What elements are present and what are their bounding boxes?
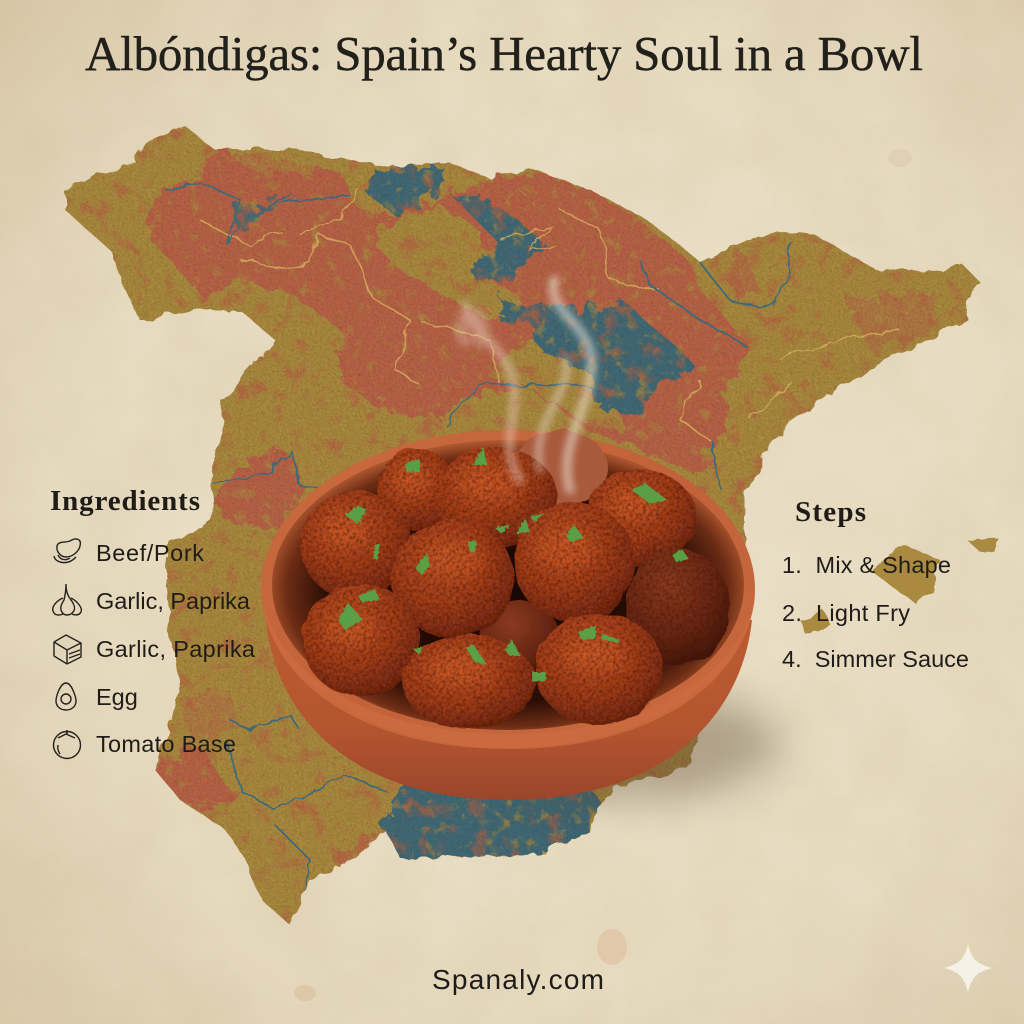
yellow rivers and boundaries: [200, 190, 900, 440]
map of Spain: [50, 110, 1000, 940]
sparkle mark: [944, 944, 992, 992]
region: red north and centre: [150, 150, 940, 865]
bowl body: [266, 620, 752, 800]
item: garlic: Garlic, Paprika: [96, 588, 251, 614]
ingredients heading: Ingredients: [50, 485, 200, 517]
region: blue patches: [235, 165, 695, 860]
steam: [462, 280, 591, 490]
bowl interior: [272, 440, 744, 730]
bowl rim: [261, 430, 755, 748]
item: garlic: [53, 584, 251, 615]
item: tomato: Tomato Base: [96, 731, 236, 757]
item: beef or pork: Beef/Pork: [96, 540, 204, 566]
region: ochre centre patches: [135, 140, 625, 430]
step 1: 1. Mix & Shape: [782, 552, 951, 578]
meatball texture: [300, 447, 730, 729]
item: tomato: [54, 730, 236, 758]
mottling: [68, 152, 968, 921]
Balearic islands: [800, 538, 998, 637]
title: Albóndigas: Spain’s Hearty Soul in a Bowl: [85, 26, 923, 81]
step 4: 4. Simmer Sauce: [782, 646, 969, 672]
blue river lines: [165, 185, 790, 890]
shadow under bowl: [470, 690, 780, 800]
item: egg: Egg: [96, 684, 138, 710]
footer site name: Spanaly.com: [432, 964, 604, 995]
item: beef or pork: [54, 539, 204, 566]
step 2: 2. Light Fry: [782, 600, 910, 626]
ingredients panel: [50, 485, 256, 758]
sauce highlights: [321, 466, 661, 686]
meatball speckle: [304, 451, 692, 725]
item: egg: [56, 683, 138, 710]
parsley: [338, 447, 689, 681]
meatballs: [300, 430, 730, 729]
steps panel: [782, 496, 969, 672]
steps heading: Steps: [795, 496, 866, 528]
grain texture: [50, 110, 1000, 940]
bowl of meatballs: [261, 430, 755, 800]
item: cube: Garlic, Paprika: [96, 636, 256, 662]
